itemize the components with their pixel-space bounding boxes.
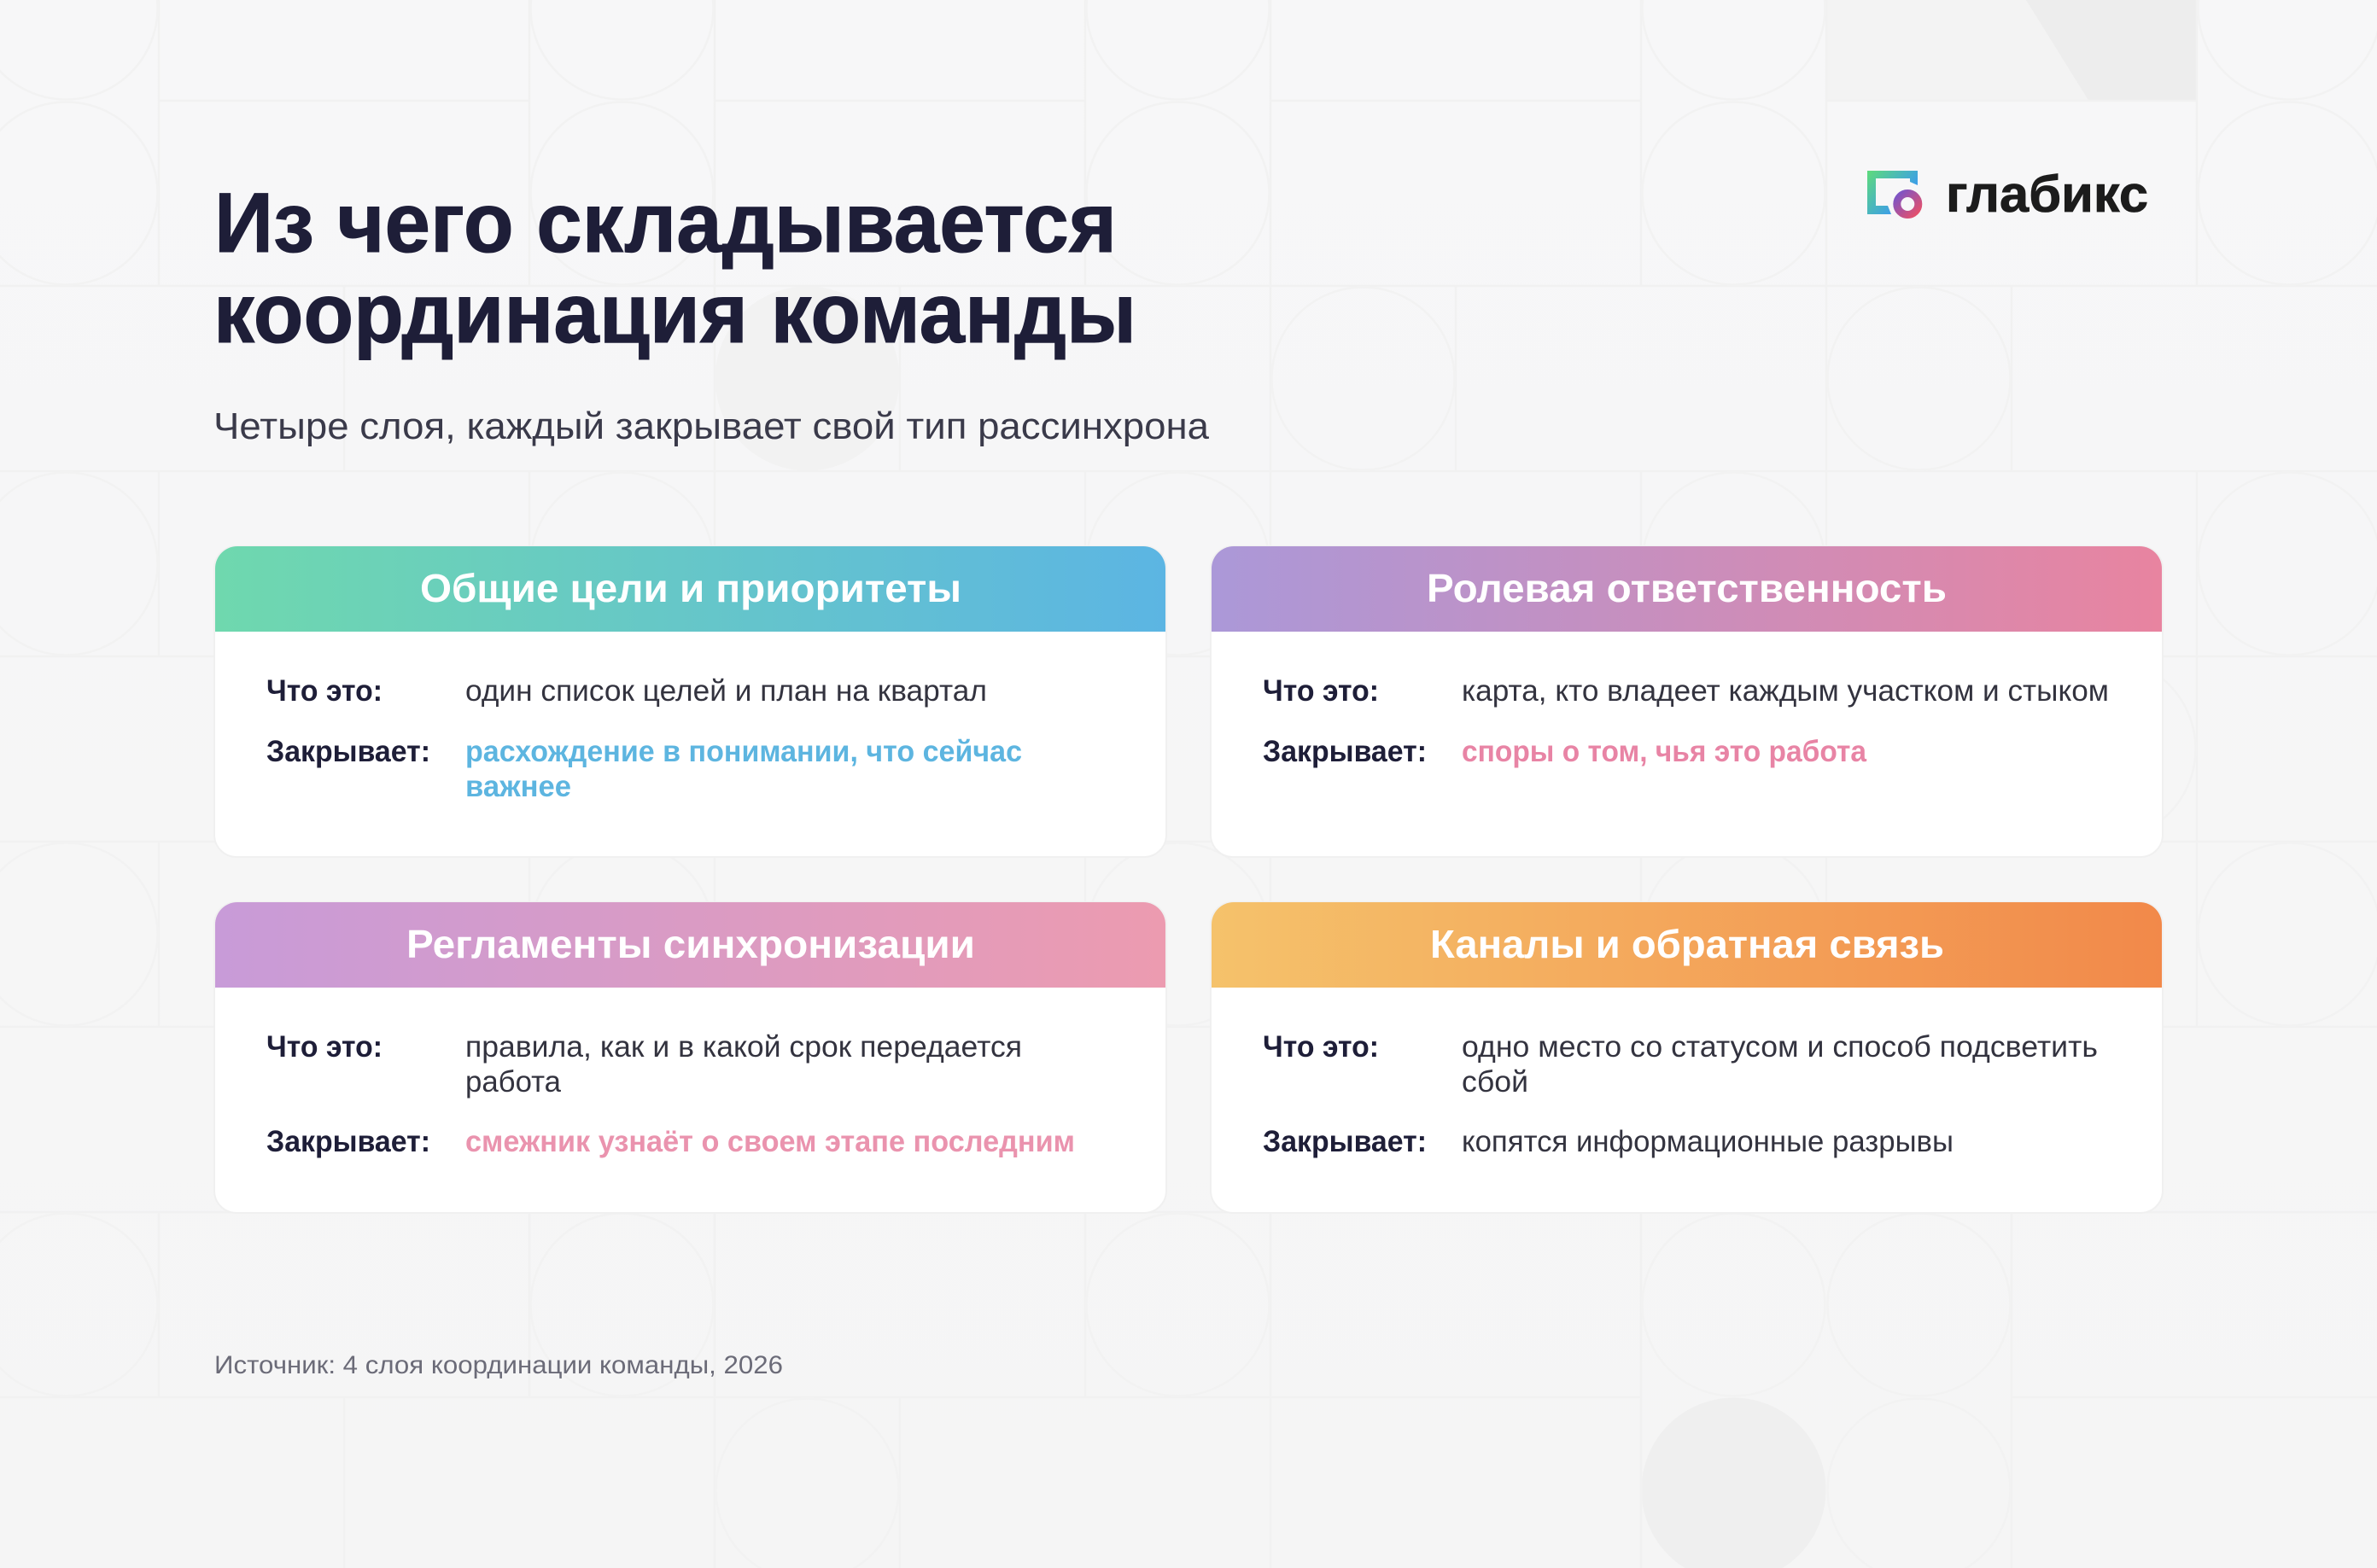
panel: Ролевая ответственность (1211, 546, 2163, 857)
panel: Общие цели и приоритеты (214, 546, 1166, 857)
what it closes (266, 735, 1022, 803)
card header: Общие цели и приоритеты (420, 566, 961, 610)
logo (1867, 166, 2148, 223)
what it closes: копятся информационные разрывы (1462, 1125, 1954, 1158)
what it is: Что это: (266, 1030, 383, 1064)
what it is: правила, как и в какой срок передается (465, 1030, 1022, 1064)
title (213, 175, 1136, 360)
panel: Регламенты синхронизации (214, 902, 1166, 1213)
what it closes: споры о том, чья это работа (1462, 735, 1867, 768)
what it is: один список целей и план на квартал (465, 674, 987, 708)
what it is: одно место со статусом и способ подсветить (1462, 1030, 2098, 1064)
source footnote: Источник: 4 слоя координации команды, 2026 (214, 1351, 783, 1379)
what it closes: расхождение в понимании, что сейчас (465, 735, 1022, 768)
card header (1212, 902, 2162, 988)
icon: logo mark (1867, 171, 1919, 215)
title: Из чего складывается (214, 175, 1117, 270)
what it closes: Закрывает: (266, 1125, 430, 1158)
what it is (1263, 1030, 2098, 1099)
card header: Регламенты синхронизации (406, 922, 975, 966)
what it is: работа (465, 1065, 562, 1099)
what it closes: Закрывает: (1263, 735, 1427, 768)
what it closes: Закрывает: (266, 735, 430, 768)
what it is: карта, кто владеет каждым участком и стыком (1462, 674, 2109, 708)
what it is: Что это: (266, 674, 383, 708)
what it is: Что это: (1263, 1030, 1379, 1064)
card header (215, 546, 1165, 632)
card header (215, 902, 1165, 988)
what it closes: Закрывает: (1263, 1125, 1427, 1158)
card header: Ролевая ответственность (1427, 566, 1947, 610)
what it is (266, 1030, 1022, 1099)
logo wordmark: глабикс (1946, 166, 2148, 223)
what it closes: важнее (465, 770, 571, 803)
title: координация команды (213, 265, 1136, 360)
what it is: сбой (1462, 1065, 1528, 1099)
card header (1212, 546, 2162, 632)
what it closes (1263, 735, 1867, 768)
subtitle: Четыре слоя, каждый закрывает свой тип рассинхрона (213, 405, 1210, 447)
what it closes: смежник узнаёт о своем этапе последним (465, 1125, 1075, 1158)
panel: Каналы и обратная связь (1211, 902, 2163, 1213)
what it is: Что это: (1263, 674, 1379, 708)
card header: Каналы и обратная связь (1430, 922, 1944, 966)
